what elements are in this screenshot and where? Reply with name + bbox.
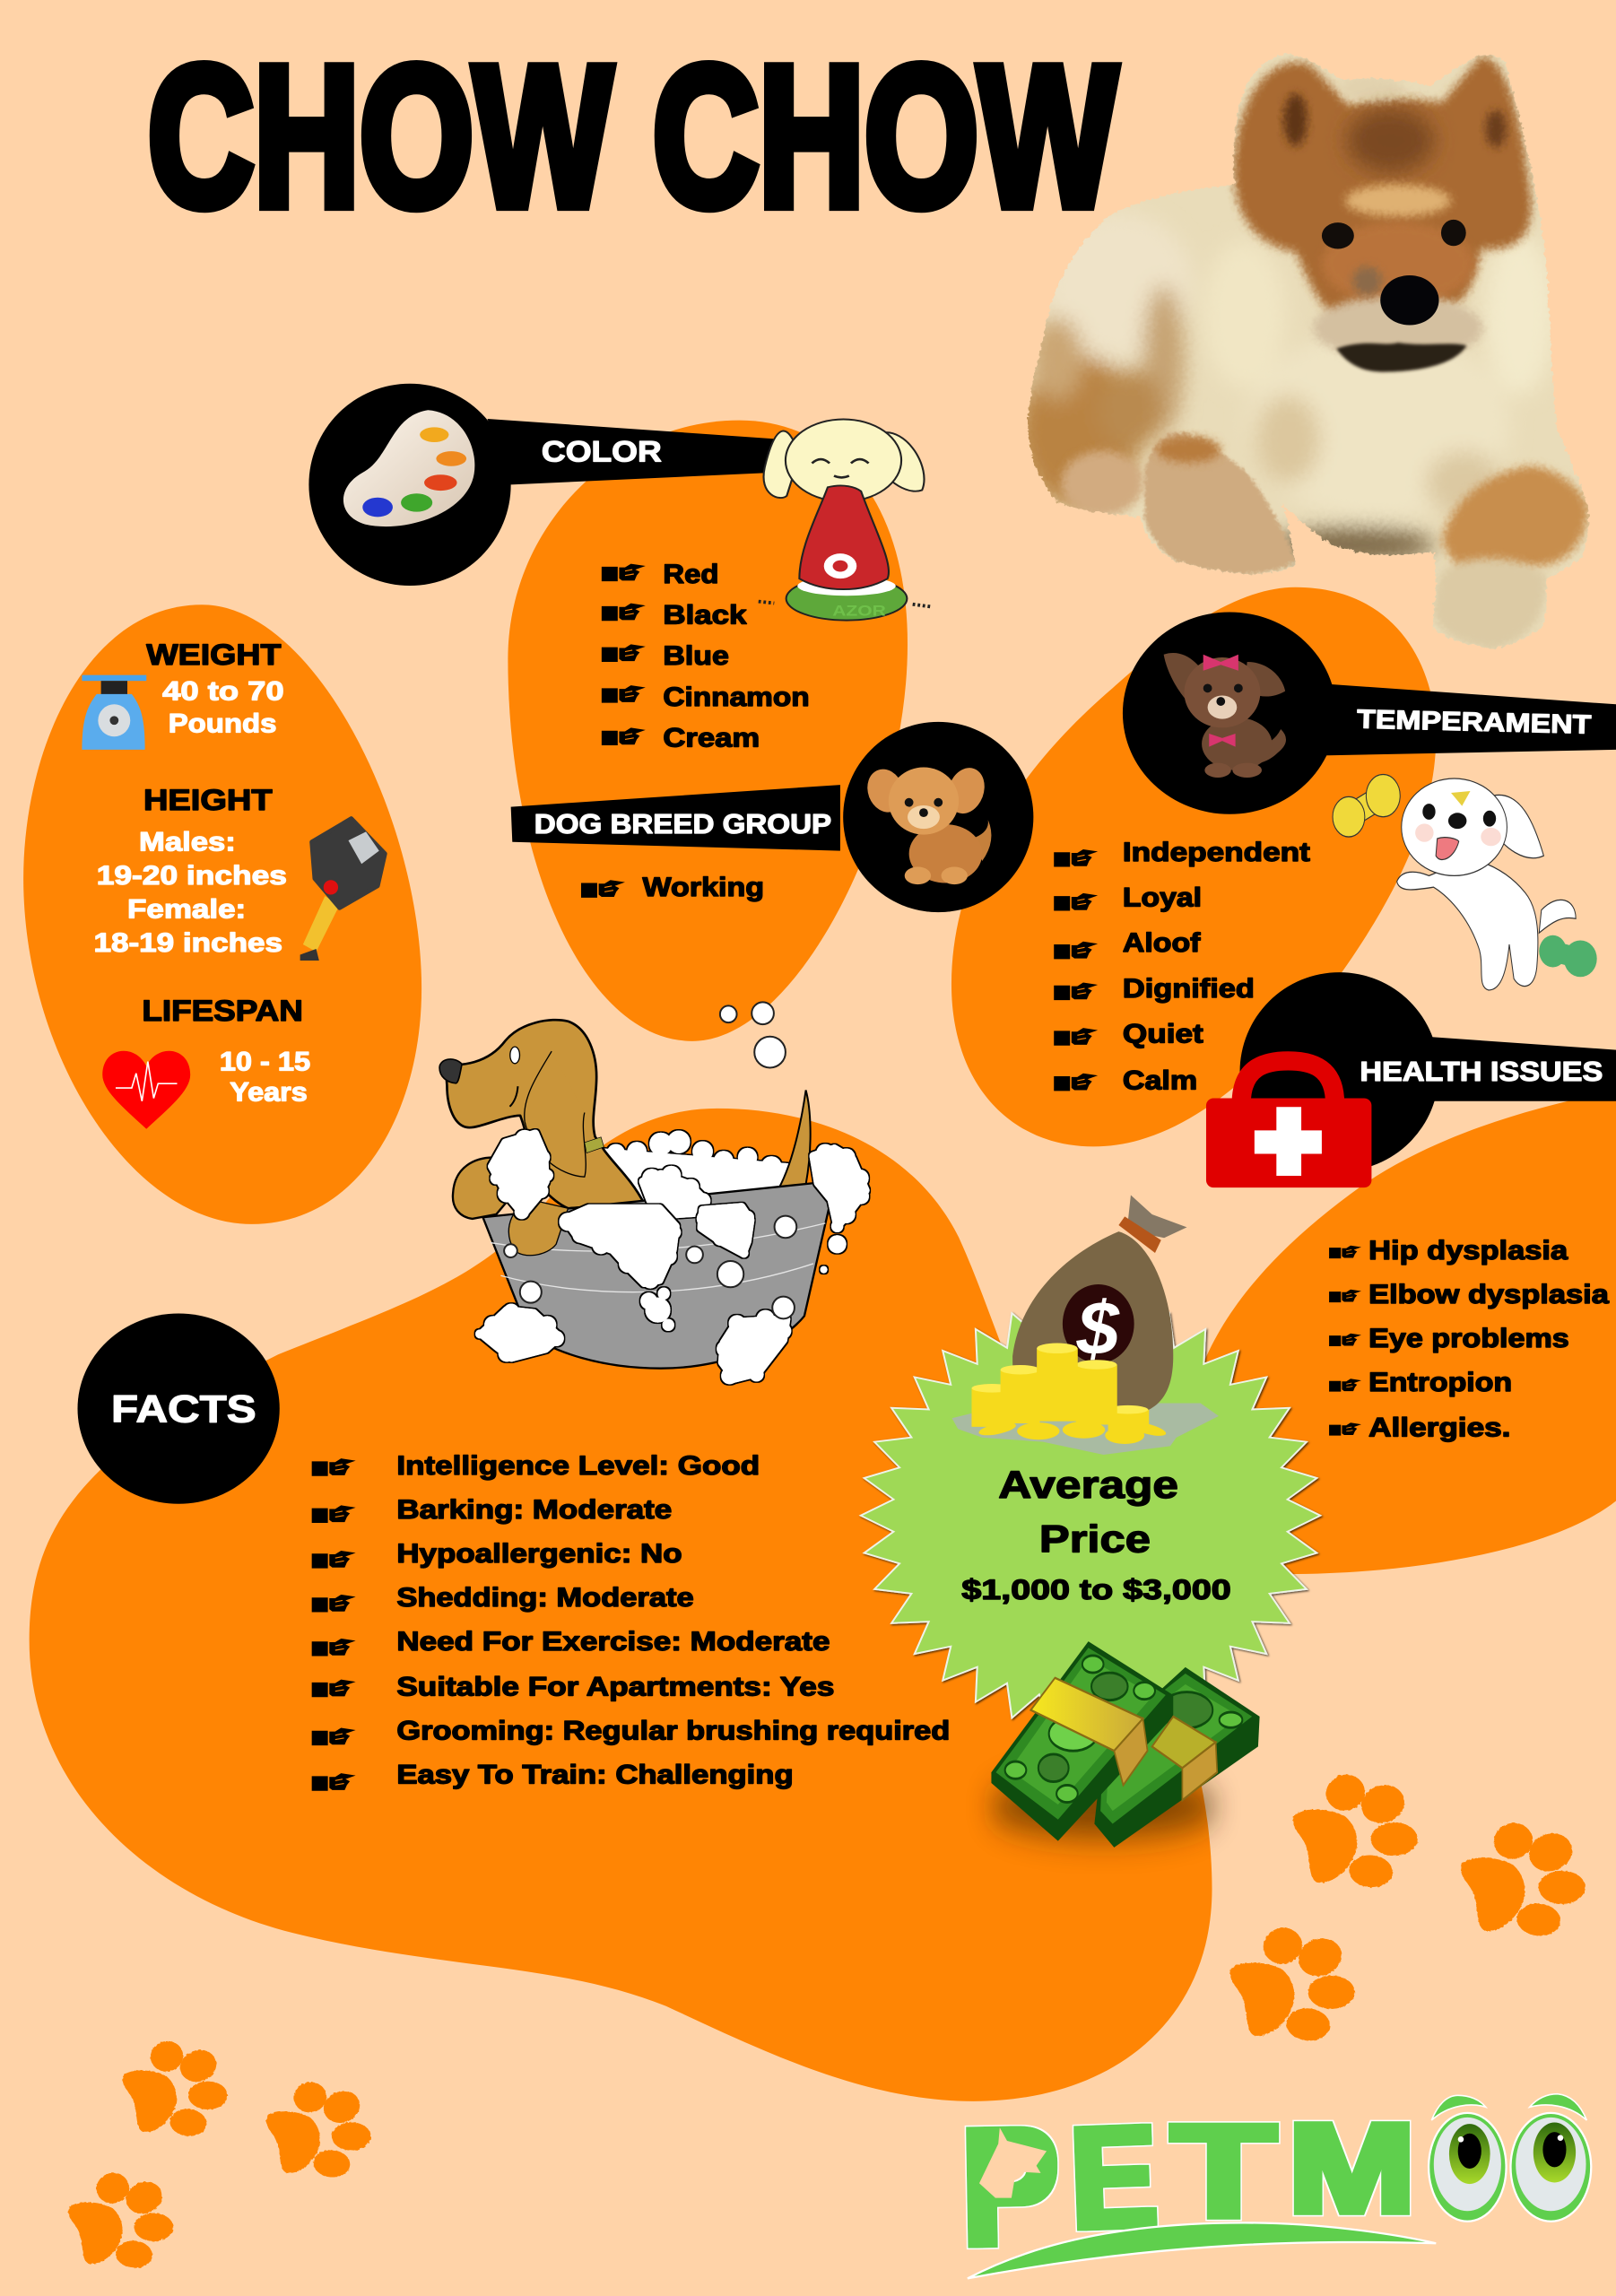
unit: Years bbox=[230, 1078, 308, 1108]
circle badge bbox=[308, 384, 511, 586]
item: Allergies: Allergies. bbox=[1368, 1413, 1510, 1443]
photo: chow chow puppy bbox=[1017, 44, 1603, 659]
label: DOG BREED GROUP bbox=[534, 810, 831, 839]
paws bbox=[453, 1158, 511, 1219]
paw print 3 bbox=[1230, 1924, 1355, 2042]
males value: 19-20 inches bbox=[97, 861, 287, 891]
decorative paw prints, left bbox=[68, 2038, 371, 2269]
soap bubbles bbox=[504, 1002, 796, 1318]
item: Hip dysplasia: Hip dysplasia bbox=[1368, 1236, 1568, 1265]
icon: white dog playing with toys bbox=[1333, 775, 1597, 990]
value: 40 to 70 bbox=[162, 676, 284, 706]
item: Blue: Blue bbox=[663, 641, 729, 671]
item: Aloof: Aloof bbox=[1123, 928, 1201, 958]
panel: health toe blob bbox=[1186, 1091, 1616, 1574]
left eye bbox=[1429, 2095, 1507, 2222]
paw print 2 bbox=[1461, 1819, 1586, 1937]
dog tail bbox=[776, 1090, 811, 1194]
item: Quiet: Quiet bbox=[1123, 1019, 1203, 1048]
dog nose bbox=[439, 1059, 462, 1083]
dog mouth bbox=[509, 1086, 517, 1107]
icon: paint palette bbox=[343, 410, 474, 526]
header: dog breed group bbox=[511, 722, 1033, 912]
price range: $1,000 to $3,000 bbox=[961, 1574, 1231, 1605]
item: Blue bbox=[602, 641, 729, 671]
logo letters: P bbox=[960, 2092, 1060, 2282]
circle badge bbox=[1123, 612, 1336, 814]
dog silhouette in P bbox=[979, 2127, 1047, 2198]
panel: big paw pad (facts) bbox=[30, 1109, 1212, 2101]
item: Cinnamon bbox=[602, 683, 810, 712]
header: color bbox=[308, 384, 780, 586]
circle badge bbox=[1240, 972, 1438, 1171]
band bbox=[511, 785, 840, 851]
item: Entropion bbox=[1329, 1368, 1512, 1397]
dog eye bbox=[510, 1047, 519, 1064]
value: 10 - 15 bbox=[220, 1047, 310, 1076]
callout: average price starburst bbox=[861, 1195, 1320, 1731]
logo letters: E bbox=[1069, 2096, 1159, 2260]
swoosh bbox=[968, 2222, 1436, 2278]
panel: vitals toe blob bbox=[23, 604, 421, 1224]
label: TEMPERAMENT bbox=[1357, 705, 1592, 740]
icon: cream dog eating meat bbox=[759, 419, 930, 621]
paw print 1 bbox=[1293, 1770, 1418, 1890]
header: facts bbox=[78, 1313, 280, 1504]
males label: Males: bbox=[139, 828, 236, 857]
green toy bbox=[1539, 935, 1597, 977]
paw print 4 bbox=[123, 2038, 228, 2138]
dollar sign: $ bbox=[1076, 1285, 1120, 1370]
item: Quiet bbox=[1054, 1019, 1203, 1048]
fur and markings bbox=[1017, 44, 1603, 659]
icon: stacks of banknotes bbox=[988, 1641, 1260, 1848]
item: Loyal: Loyal bbox=[1123, 883, 1202, 913]
item: grooming: Grooming: Regular brushing required bbox=[396, 1717, 950, 1746]
circle badge bbox=[843, 722, 1033, 912]
text block: weight bbox=[146, 638, 284, 738]
tub bbox=[482, 1183, 831, 1369]
item: Black bbox=[602, 601, 747, 631]
female label: Female: bbox=[127, 895, 246, 925]
paw print 6 bbox=[68, 2170, 173, 2269]
item: Eye problems: Eye problems bbox=[1368, 1324, 1569, 1353]
header: health issues bbox=[1206, 972, 1616, 1187]
label: HEALTH ISSUES bbox=[1360, 1057, 1603, 1087]
panel: color toe blob bbox=[508, 421, 908, 1041]
item: Red bbox=[602, 560, 718, 589]
back foam bbox=[604, 1131, 789, 1212]
icon: money bag with coins bbox=[951, 1195, 1219, 1455]
circle badge bbox=[78, 1313, 280, 1504]
list: dog breed group: Working bbox=[643, 873, 764, 902]
item: hypoallergenic bbox=[312, 1539, 682, 1569]
item: hypoallergenic: Hypoallergenic: No bbox=[396, 1539, 682, 1569]
item: barking: Barking: Moderate bbox=[396, 1495, 672, 1525]
icon: heart with pulse bbox=[102, 1051, 190, 1129]
list: temperament bbox=[1054, 838, 1310, 1096]
item: Allergies bbox=[1329, 1413, 1510, 1443]
heading: WEIGHT bbox=[146, 638, 281, 671]
item: Dignified: Dignified bbox=[1123, 974, 1255, 1004]
foam clusters bbox=[491, 1130, 553, 1219]
decorative paw prints, right bbox=[1230, 1770, 1586, 2042]
heading: average: Average bbox=[998, 1464, 1178, 1506]
list: colors bbox=[602, 560, 810, 753]
label: FACTS bbox=[111, 1387, 256, 1430]
item: barking bbox=[312, 1495, 672, 1525]
panel: temperament toe blob bbox=[951, 587, 1436, 1146]
list: facts bbox=[312, 1451, 950, 1791]
starburst bbox=[861, 1300, 1320, 1731]
list: dog breed group bbox=[581, 873, 764, 902]
heading: LIFESPAN bbox=[142, 994, 303, 1027]
item: Independent bbox=[1054, 838, 1310, 867]
icon: weighing scale bbox=[82, 675, 146, 750]
item: Dignified bbox=[1054, 974, 1255, 1004]
label: COLOR bbox=[542, 434, 662, 467]
logo letters: T bbox=[1171, 2098, 1276, 2246]
icon: cream dog eating meat: AZOR bbox=[832, 602, 886, 619]
unit: Pounds bbox=[169, 709, 276, 738]
item: Black: Black bbox=[663, 601, 747, 631]
item: Cream: Cream bbox=[663, 724, 760, 753]
item: Cream bbox=[602, 724, 760, 753]
collar bbox=[585, 1137, 604, 1153]
logo letters: M bbox=[1288, 2097, 1415, 2240]
female value: 18-19 inches bbox=[93, 928, 282, 958]
heading: price: Price bbox=[1039, 1518, 1151, 1561]
icon: tan puppy bbox=[862, 762, 991, 884]
text block: height bbox=[93, 783, 287, 958]
logo letters bbox=[960, 2092, 1415, 2282]
yellow toy bbox=[1333, 775, 1400, 837]
text block: lifespan bbox=[142, 994, 310, 1108]
item: Aloof bbox=[1054, 928, 1201, 959]
item: shedding bbox=[312, 1583, 694, 1613]
icon: brown puppy with bow bbox=[1164, 653, 1286, 778]
item: training bbox=[312, 1761, 794, 1791]
heading: HEIGHT bbox=[143, 783, 273, 816]
icon: tape measure bbox=[300, 819, 385, 961]
right eye bbox=[1510, 2094, 1591, 2222]
dog ear bbox=[525, 1051, 586, 1177]
logo: petmoo bbox=[960, 2092, 1591, 2282]
item: intelligence bbox=[312, 1451, 760, 1481]
title: CHOW CHOW bbox=[148, 26, 1117, 248]
right eye bbox=[1441, 220, 1466, 246]
item: apartments: Suitable For Apartments: Yes bbox=[396, 1673, 834, 1702]
band bbox=[1427, 1037, 1616, 1101]
icon: first aid kit bbox=[1206, 1061, 1371, 1187]
item: intelligence: Intelligence Level: Good bbox=[396, 1451, 760, 1481]
nose bbox=[1380, 275, 1438, 325]
dog body bbox=[446, 1020, 645, 1208]
item: shedding: Shedding: Moderate bbox=[396, 1583, 694, 1613]
item: Entropion: Entropion bbox=[1368, 1368, 1512, 1397]
band bbox=[1317, 683, 1616, 755]
item: Independent: Independent bbox=[1123, 838, 1310, 867]
paw print 5 bbox=[266, 2078, 371, 2179]
item: Calm bbox=[1054, 1066, 1197, 1096]
list: health issues bbox=[1329, 1236, 1610, 1443]
item: Red: Red bbox=[663, 560, 718, 589]
illustration: dog in bath tub bbox=[439, 1002, 869, 1384]
item: exercise: Need For Exercise: Moderate bbox=[396, 1627, 830, 1657]
band bbox=[488, 419, 780, 484]
item: Loyal bbox=[1054, 883, 1202, 913]
item: Cinnamon: Cinnamon bbox=[663, 683, 810, 712]
mouth bbox=[1336, 343, 1467, 372]
header: temperament bbox=[1123, 612, 1616, 814]
item: training: Easy To Train: Challenging bbox=[396, 1761, 794, 1790]
left eye bbox=[1322, 222, 1354, 249]
item: Elbow dysplasia: Elbow dysplasia bbox=[1368, 1280, 1610, 1309]
item: Calm: Calm bbox=[1123, 1066, 1197, 1096]
